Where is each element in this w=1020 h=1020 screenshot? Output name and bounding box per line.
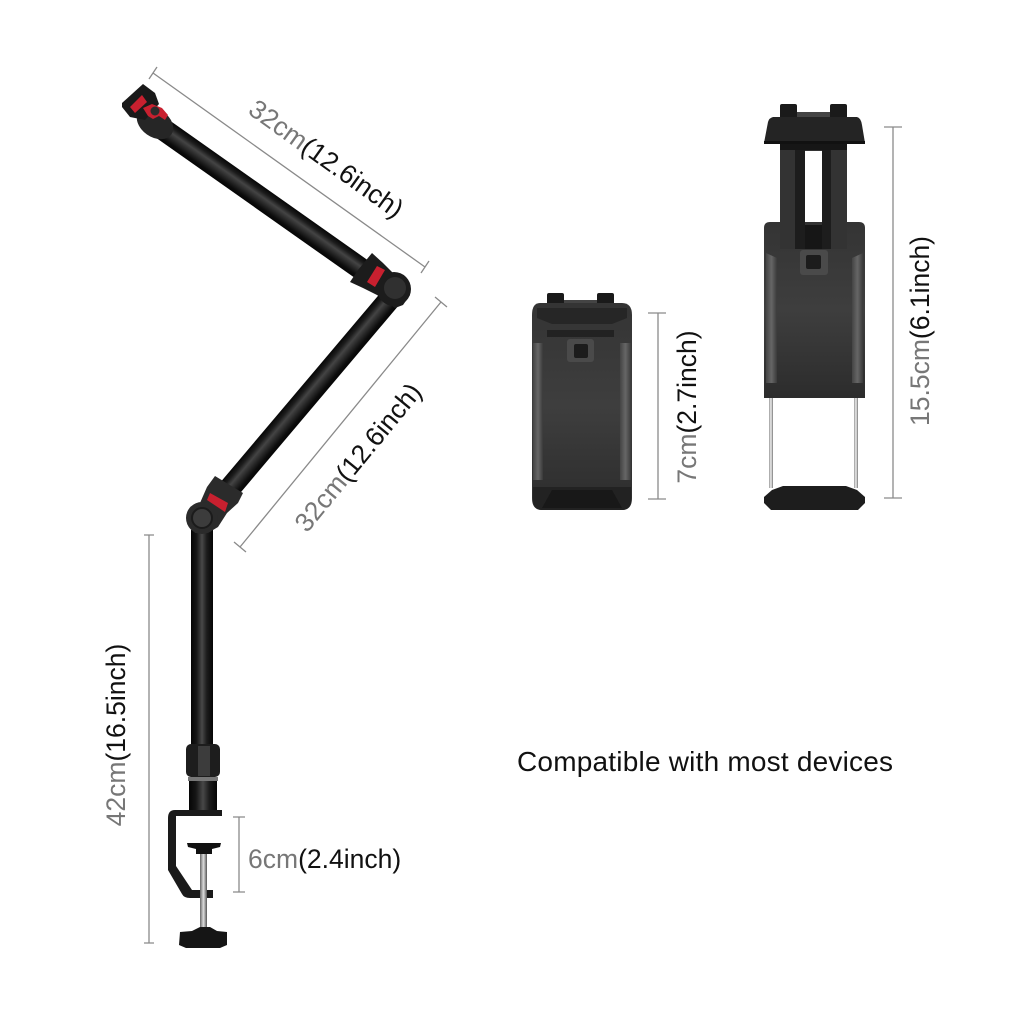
dimension: pole <box>101 535 154 943</box>
head block <box>122 84 159 120</box>
outer hub <box>186 502 218 534</box>
top joint <box>122 84 179 146</box>
arm: middle segment <box>216 291 398 501</box>
label: 6cm(2.4inch) <box>248 844 401 874</box>
red wheel <box>207 493 228 512</box>
clamp <box>168 744 227 948</box>
upper elbow joint <box>350 253 411 308</box>
dimension: small holder <box>648 313 702 499</box>
bottom clamp <box>764 486 865 510</box>
top cap <box>764 117 865 143</box>
button <box>800 250 828 275</box>
red lever <box>143 104 168 120</box>
dimension: upper arm <box>149 67 429 273</box>
bottom cap <box>533 487 631 510</box>
arm: upper segment <box>151 116 368 278</box>
top cap <box>537 308 627 324</box>
dimension: clamp opening <box>233 817 401 892</box>
clamp frame <box>168 810 222 898</box>
hub <box>384 277 406 299</box>
body <box>532 303 632 510</box>
small phone holder <box>532 293 632 510</box>
extended phone holder <box>764 104 865 510</box>
caption: Compatible with most devices <box>517 746 893 777</box>
collar <box>186 744 220 777</box>
slider window <box>805 151 822 222</box>
clamp post <box>189 781 217 811</box>
side rails <box>533 343 543 480</box>
outer hub <box>377 272 411 306</box>
red wheel <box>130 95 147 113</box>
side rails <box>766 253 777 383</box>
hub <box>192 508 212 528</box>
button <box>567 339 594 362</box>
dimension: middle arm <box>234 297 447 552</box>
block <box>350 253 410 308</box>
hub <box>150 106 160 116</box>
knob <box>179 927 227 948</box>
body <box>764 222 865 398</box>
swivel base <box>131 100 179 146</box>
clips <box>780 104 797 119</box>
dimension: extended holder <box>884 127 935 498</box>
label: 42cm(16.5inch) <box>101 644 131 826</box>
arm: lower pole <box>191 530 213 746</box>
block <box>188 476 243 533</box>
clips <box>547 293 564 305</box>
lower elbow joint <box>186 476 243 534</box>
red wheel <box>367 266 385 287</box>
rods <box>769 398 773 488</box>
slider <box>780 150 847 249</box>
pad <box>187 843 221 854</box>
label: 32cm(12.6inch) <box>288 377 428 537</box>
label: 7cm(2.7inch) <box>672 330 702 484</box>
screw <box>200 854 207 930</box>
label: 15.5cm(6.1inch) <box>905 236 935 426</box>
label: 32cm(12.6inch) <box>243 93 409 224</box>
